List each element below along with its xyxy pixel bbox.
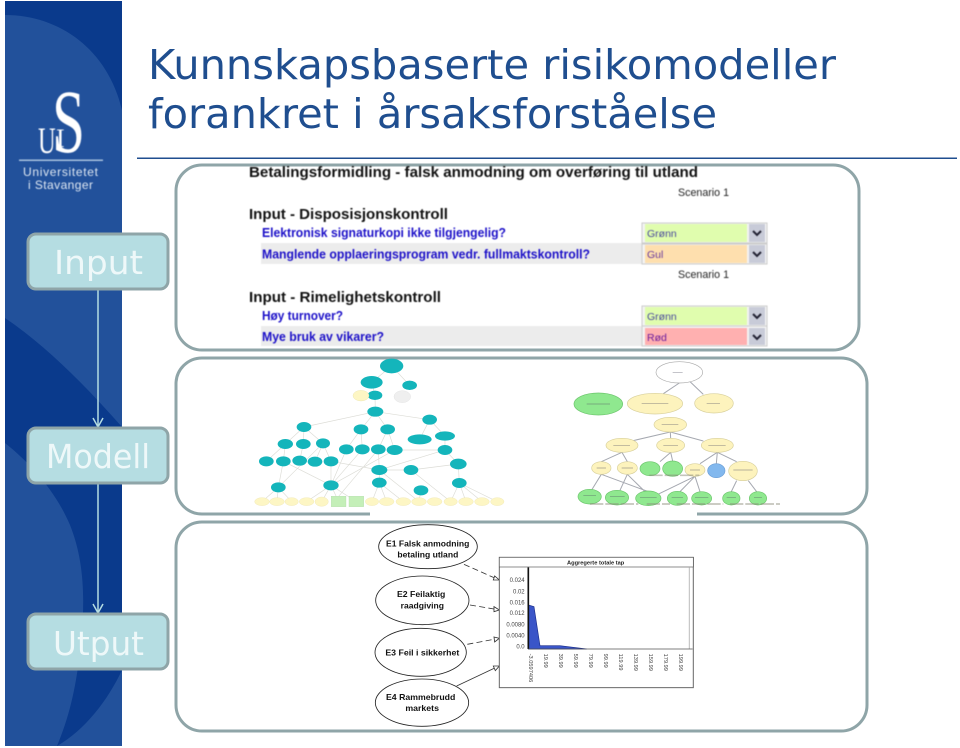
chart: aggregated total loss (499, 557, 693, 688)
chart: teal network (255, 359, 504, 507)
logo: Universitetet i Stavanger (19, 73, 103, 192)
section: Rimelighetskontroll: Høy turnover? (262, 309, 343, 323)
event: E2 Feilaktig: raadgiving (401, 601, 444, 611)
box: Modell: Modell (46, 437, 150, 476)
chart: aggregated total loss: 79.99 (587, 654, 593, 668)
chart: aggregated total loss: 119.99 (617, 654, 623, 671)
chart: aggregated total loss: 0.016 (510, 601, 525, 607)
form contents (249, 165, 767, 346)
chart: aggregated total loss: 159.99 (647, 654, 653, 671)
event: E4 Rammebrudd (375, 679, 469, 726)
logo: Universitetet i Stavanger: i Stavanger (28, 178, 93, 192)
dropdown: Grønn 2: Grønn (647, 311, 677, 323)
logo: Universitetet i Stavanger: U (38, 120, 56, 161)
arrow: model to output (93, 484, 103, 613)
logo: Universitetet i Stavanger: Universitetet (23, 165, 99, 179)
event: E1 Falsk anmodning: betaling utland (397, 549, 458, 559)
section: Disposisjonskontroll: Elektronisk signaturkopi ikke tilgjengelig? (262, 226, 506, 240)
event: E4 Rammebrudd: E4 Rammebrudd (386, 692, 455, 702)
panel: input form (176, 165, 859, 350)
chart: aggregated total loss: 0.0080 (506, 623, 525, 629)
title: forankret i årsaksforståelse (148, 90, 717, 138)
dropdown: Gul (642, 244, 767, 264)
event: E1 Falsk anmodning (379, 525, 477, 569)
chart: aggregated total loss: 99.99 (602, 654, 608, 668)
chart: aggregated total loss: 0.0 (516, 645, 525, 651)
arrow: input to model (93, 290, 103, 427)
dropdown: Grønn: Grønn (647, 228, 677, 240)
dropdown: Gul: Gul (647, 249, 663, 261)
event: E4 Rammebrudd: markets (405, 703, 439, 713)
dropdown: Grønn (642, 223, 767, 243)
event: E1 Falsk anmodning: E1 Falsk anmodning (386, 539, 469, 549)
arrows: events to chart (457, 564, 499, 686)
chart: aggregated total loss: 0.012 (510, 611, 525, 617)
chart: aggregated total loss: 39.99 (557, 654, 563, 668)
dropdown: Grønn 2 (642, 306, 767, 326)
chart: aggregated total loss: 0.02 (513, 589, 525, 595)
chart: aggregated total loss: 0.0040 (506, 634, 525, 640)
chart: aggregated total loss: -3.0597406 (527, 654, 533, 682)
panel: model (176, 358, 867, 516)
logo: Universitetet i Stavanger: I (56, 124, 65, 153)
panel: blue sidebar (5, 1, 122, 746)
section: Disposisjonskontroll: Input - Disposisjonskontroll (249, 207, 448, 223)
event: E3 Feil i sikkerhet (375, 628, 466, 676)
chart: green and yellow network (574, 362, 780, 506)
chart: aggregated total loss: 59.99 (572, 654, 578, 668)
chart: aggregated total loss: 139.99 (632, 654, 638, 671)
dropdown: Rød (642, 326, 767, 346)
box: Input: Input (54, 243, 143, 282)
section: Rimelighetskontroll (249, 269, 767, 346)
logo: Universitetet i Stavanger: S (52, 73, 85, 172)
event: E3 Feil i sikkerhet: E3 Feil i sikkerhet (385, 648, 460, 658)
section: Disposisjonskontroll (249, 187, 767, 264)
event: E2 Feilaktig (376, 576, 469, 625)
form heading: Betalingsformidling - falsk anmodning om overføring til utland (249, 165, 698, 181)
chart: aggregated total loss: 199.99 (677, 654, 683, 671)
section: Rimelighetskontroll: Input - Rimelighetskontroll (249, 290, 441, 306)
dropdown: Rød: Rød (647, 332, 667, 344)
title: Kunnskapsbaserte risikomodeller (148, 41, 836, 89)
section: Disposisjonskontroll: Scenario 1 (678, 187, 729, 199)
box: Utput (28, 614, 168, 669)
event: E2 Feilaktig: E2 Feilaktig (397, 589, 445, 599)
section: Rimelighetskontroll: Scenario 1 (678, 269, 729, 281)
chart: aggregated total loss: 179.99 (662, 654, 668, 671)
box: Utput: Utput (53, 624, 144, 663)
panel: output (176, 522, 867, 731)
chart: aggregated total loss: 0.024 (510, 578, 525, 584)
box: Input (28, 234, 168, 289)
section: Rimelighetskontroll: Mye bruk av vikarer? (262, 330, 384, 344)
title (148, 41, 836, 138)
chart: aggregated total loss: Aggregerte totale tap (567, 560, 625, 566)
section: Disposisjonskontroll: Manglende opplaeringsprogram vedr. fullmaktskontroll? (262, 248, 590, 262)
chart: aggregated total loss: 19.99 (542, 654, 548, 668)
box: Modell (28, 428, 168, 483)
